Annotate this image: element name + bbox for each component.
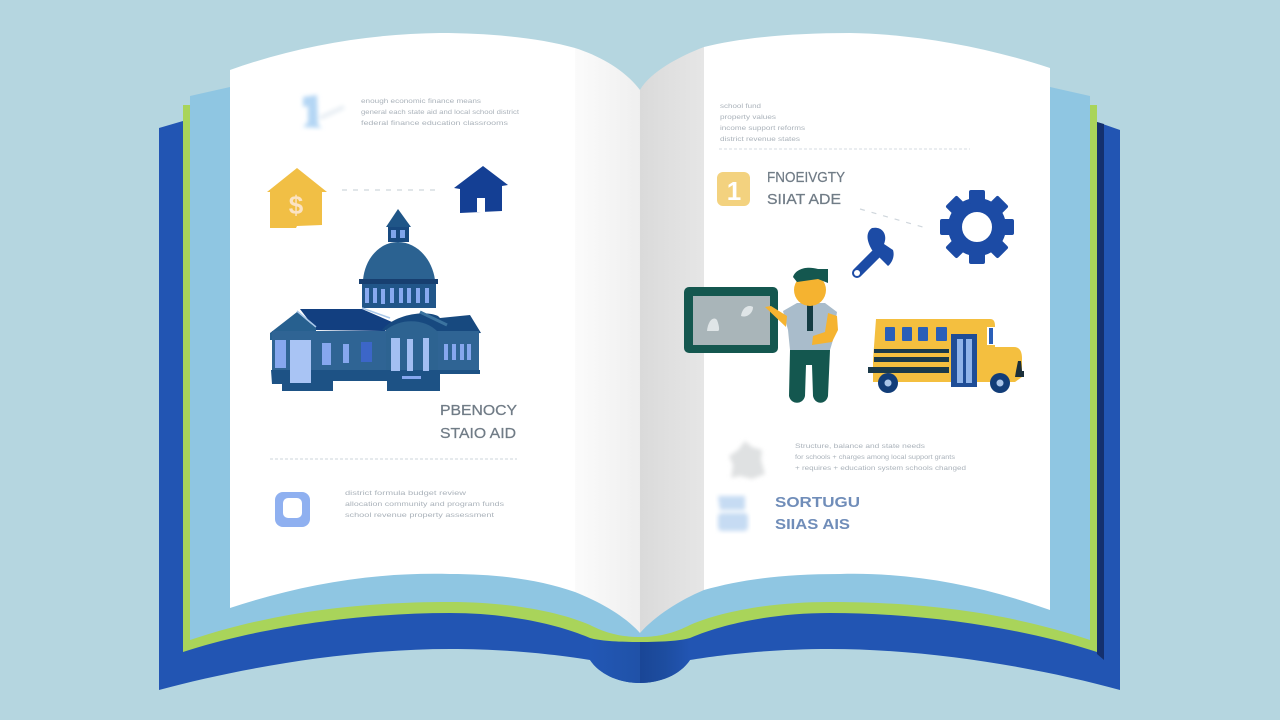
right page: [704, 33, 1050, 610]
windows: [275, 338, 471, 383]
right heading one: FNOEIVGTY: [767, 169, 845, 186]
right top text block: [720, 104, 805, 143]
hair: [793, 268, 828, 283]
arms: [765, 306, 787, 327]
bus wheels: [878, 373, 898, 393]
right top text block: district revenue states: [720, 137, 800, 143]
left page: [230, 33, 575, 608]
icon: yellow house with dollar: [267, 168, 327, 228]
right heading one: SIIAT ADE: [767, 191, 841, 208]
left divider: [270, 458, 517, 460]
right lower text block: for schools + charges among local support grants: [795, 455, 955, 461]
right divider: [719, 148, 970, 150]
bus stripes: [874, 349, 949, 353]
dashed connector: [342, 189, 440, 191]
left bottom text block: school revenue property assessment: [345, 513, 494, 519]
right heading one: [767, 169, 845, 208]
icon: light blue number: [718, 496, 748, 531]
left top text block: [361, 99, 519, 127]
left top text block: federal finance education classrooms: [361, 121, 508, 127]
bus windows: [885, 327, 947, 341]
left heading: [440, 402, 517, 442]
bus body: [873, 319, 1022, 382]
chalkboard: [684, 287, 778, 353]
right lower text block: + requires + education system schools changed: [795, 466, 966, 472]
right gutter: [640, 47, 704, 633]
drum: [362, 284, 436, 308]
left heading: PBENOCY: [440, 402, 517, 419]
left bottom text block: [345, 491, 504, 519]
icon: yellow number badge: 1: [727, 176, 741, 206]
bus door: [951, 334, 977, 387]
left bottom text block: allocation community and program funds: [345, 502, 504, 508]
right lower text block: Structure, balance and state needs: [795, 444, 925, 450]
head: [794, 274, 826, 306]
bus bumper: [1015, 361, 1024, 377]
lantern: [386, 209, 411, 227]
left top text block: enough economic finance means: [361, 99, 481, 105]
dashed connector: [860, 209, 926, 228]
right heading two: SORTUGU: [775, 494, 860, 511]
left top text block: general each state aid and local school district: [361, 110, 519, 116]
icon: blue house: [454, 166, 508, 213]
dome: [363, 242, 435, 280]
left gutter: [575, 48, 640, 633]
icon: gear: [940, 190, 1014, 264]
teacher and chalkboard: [684, 268, 838, 403]
shirt: [783, 303, 837, 350]
right lower text block: [795, 444, 966, 472]
book: [159, 33, 1120, 690]
right heading two: SIIAS AIS: [775, 516, 850, 533]
legs: [789, 350, 830, 403]
main body: [272, 331, 479, 373]
green page edge: [183, 105, 1097, 652]
icon: wrench: [854, 228, 894, 276]
icon: faded gray shape: [729, 441, 765, 479]
capitol building: [270, 209, 481, 391]
tie: [807, 305, 813, 331]
left top icon: number one: [303, 95, 344, 128]
roofs: [300, 309, 392, 331]
bus side window: [987, 327, 995, 345]
light blue pages: [190, 87, 1090, 640]
right top text block: income support reforms: [720, 126, 805, 132]
right heading two: [775, 494, 860, 533]
right top text block: school fund: [720, 104, 761, 110]
right top text block: property values: [720, 115, 776, 121]
icon: yellow number badge: [717, 172, 750, 206]
book cover: [159, 121, 1120, 690]
school bus: [868, 319, 1024, 393]
left bottom text block: district formula budget review: [345, 491, 467, 497]
left heading: STAIO AID: [440, 425, 516, 442]
icon: rounded square: [275, 492, 310, 527]
icon: yellow house with dollar: $: [289, 190, 304, 220]
